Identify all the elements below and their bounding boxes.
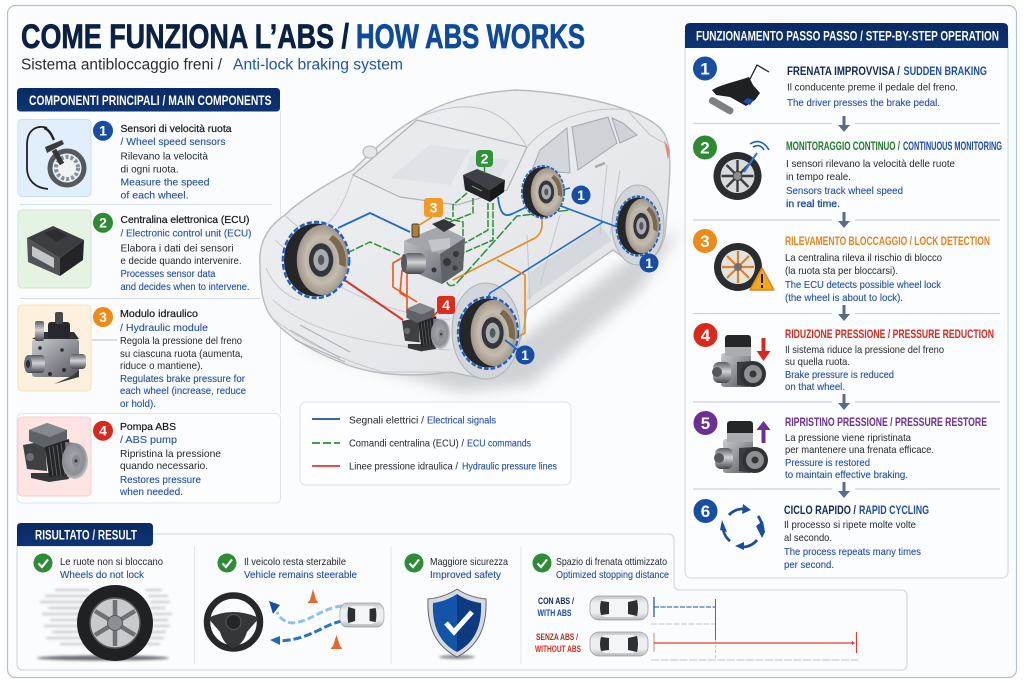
- legend: [300, 402, 571, 485]
- stopping line: without ABS: [651, 632, 860, 660]
- label: without ABS: [535, 632, 581, 655]
- text step 6: [784, 503, 929, 571]
- text: wheel speed sensors: Measure the speed: [120, 176, 210, 188]
- hydraulic and electrical lines: [330, 188, 620, 340]
- badge step 3: 3: [700, 232, 710, 251]
- text step 5: La pressione viene ripristinata: [785, 432, 911, 444]
- text step 3: The ECU detects possible wheel lock: [785, 279, 942, 291]
- text step 6: RAPID CYCLING: [859, 503, 929, 517]
- brake disc: rear upper: [522, 166, 564, 218]
- text step 2: I sensori rilevano la velocità delle ruote: [786, 158, 955, 170]
- badge step 2: 2: [700, 138, 710, 158]
- result: vehicle remains steerable: [207, 554, 384, 649]
- text: hydraulic module: Regulates brake pressure for: [120, 373, 245, 385]
- panel: step-by-step operation: [685, 23, 1008, 578]
- legend: electrical signals: Segnali elettrici /: [349, 414, 424, 426]
- arrow 5 to 6: [693, 482, 1000, 498]
- text: hydraulic module: or hold).: [120, 398, 156, 410]
- text step 4: [785, 327, 994, 393]
- text: hydraulic module: su ciascuna ruota (aumenta,: [120, 348, 243, 360]
- badge step 4: 4: [701, 326, 711, 345]
- text: electronic control unit: Elabora i dati dei sensori: [120, 243, 234, 255]
- badge 4: [93, 421, 113, 441]
- text step 2: Sensors track wheel speed: [786, 185, 903, 197]
- text: wheel speed sensors: [120, 123, 232, 202]
- badge step 6: 6: [701, 502, 710, 521]
- text: ABS pump: / ABS pump: [120, 434, 177, 446]
- heading: main components: COMPONENTI PRINCIPALI / MAIN COMPONENTS: [29, 92, 272, 108]
- badge step 2: [693, 136, 717, 160]
- badge 1 rear upper: 1: [577, 187, 585, 203]
- panel: result: [17, 523, 907, 670]
- icon: ECU box: [27, 226, 84, 276]
- icon: steering wheel: [207, 596, 260, 648]
- result: vehicle remains steerable: Vehicle remains steerable: [244, 569, 357, 581]
- text: wheel speed sensors: Sensori di velocità ruota: [120, 123, 232, 135]
- badge step 5: 5: [701, 414, 710, 433]
- text: wheel speed sensors: di ogni ruota.: [120, 164, 178, 176]
- check icon: [34, 554, 52, 572]
- arrows: steering paths: [269, 601, 342, 645]
- component 1: wheel speed sensors: [18, 120, 232, 202]
- brake disc: rear right: [616, 196, 660, 256]
- arrow: pressure down: [756, 338, 770, 361]
- component 3: hydraulic module: [18, 305, 246, 410]
- text step 4: Brake pressure is reduced: [785, 369, 894, 381]
- badge 3: 3: [99, 309, 107, 325]
- legend: electrical signals: Electrical signals: [427, 414, 496, 426]
- text step 4: Il sistema riduce la pressione del freno: [785, 344, 944, 356]
- component 4: ABS pump: [18, 417, 221, 498]
- badge 1: [93, 121, 113, 141]
- text: wheel speed sensors: of each wheel.: [120, 190, 188, 202]
- text: electronic control unit: Processes sensor data: [120, 268, 216, 280]
- text step 1: FRENATA IMPROVVISA /: [787, 64, 901, 78]
- text: ABS pump: quando necessario.: [120, 460, 208, 472]
- step 5: [694, 411, 987, 481]
- text step 3: [785, 234, 990, 304]
- text step 6: al secondo.: [784, 532, 832, 544]
- label: without ABS: SENZA ABS /: [536, 632, 578, 643]
- result: wheels do not lock: Le ruote non si bloccano: [60, 556, 163, 568]
- check icon: [218, 554, 236, 572]
- text: ABS pump: Ripristina la pressione: [120, 448, 221, 460]
- legend: ECU commands: Comandi centralina (ECU) /: [349, 438, 464, 450]
- heading: result: RISULTATO / RESULT: [35, 527, 138, 542]
- badge 3 on car: 3: [430, 200, 438, 216]
- text step 3: (la ruota sta per bloccarsi).: [785, 265, 898, 277]
- text: electronic control unit: e decide quando intervenire.: [120, 255, 242, 267]
- text step 6: per second.: [784, 559, 834, 571]
- text: wheel speed sensors: Rilevano la velocità: [120, 150, 208, 162]
- text step 2: in real time.: [786, 198, 840, 210]
- badge step 3: [693, 229, 717, 253]
- car diagram: [260, 90, 680, 392]
- legend: electrical signals: [312, 414, 496, 426]
- legend: ECU commands: [312, 438, 531, 450]
- label: with ABS: [538, 596, 574, 619]
- badge step 5: [694, 411, 718, 435]
- text: electronic control unit: [120, 214, 252, 293]
- text step 2: [786, 139, 1002, 210]
- badge 1 front: 1: [521, 347, 529, 363]
- result: optimized stopping distance: [532, 554, 860, 660]
- icon: module pressure up: [714, 421, 768, 473]
- step 1: [693, 56, 987, 115]
- step 4: [694, 323, 994, 393]
- badge 3 on car: [418, 198, 443, 226]
- result: improved safety: Maggiore sicurezza: [430, 556, 508, 568]
- badge 4: 4: [99, 423, 107, 439]
- badge 2: 2: [99, 215, 107, 231]
- panel: main components: [17, 88, 280, 503]
- component 2: ECU: [18, 210, 252, 293]
- arrow 1 to 2: [693, 116, 1000, 132]
- label: with ABS: WITH ABS: [538, 608, 572, 619]
- badge 2: [93, 213, 113, 233]
- text: ABS pump: Restores pressure: [120, 474, 201, 486]
- tyre shells: [452, 185, 664, 379]
- badge 1 front: [505, 340, 534, 364]
- heading: result: [17, 523, 153, 546]
- badge 1: 1: [99, 123, 107, 139]
- icon: shoe on pedal: [708, 65, 769, 115]
- legend: hydraulic pressure lines: Hydraulic pressure lines: [462, 460, 557, 472]
- icon: hydraulic module: [24, 312, 86, 384]
- text step 1: The driver presses the brake pedal.: [787, 97, 940, 109]
- ABS pump on car: [402, 303, 450, 351]
- badge 2 on car: [476, 150, 493, 173]
- badge 1 rear right: 1: [645, 255, 653, 271]
- badge step 1: [693, 56, 717, 80]
- subtitle: [21, 56, 403, 74]
- text step 4: on that wheel.: [785, 381, 845, 393]
- text step 1: SUDDEN BRAKING: [904, 64, 987, 78]
- heading: main components: [17, 88, 280, 112]
- text step 2: MONITORAGGIO CONTINUO /: [786, 139, 900, 153]
- result: wheels do not lock: [34, 554, 172, 661]
- text: wheel speed sensors: / Wheel speed sensors: [120, 136, 226, 148]
- text step 5: to maintain effective braking.: [785, 469, 908, 481]
- result: optimized stopping distance: Optimized stopping distance: [556, 569, 669, 581]
- legend: hydraulic pressure lines: Linee pressione idraulica /: [349, 460, 458, 472]
- text: ABS pump: Pompa ABS: [120, 421, 176, 433]
- text: electronic control unit: Centralina elettronica (ECU): [120, 214, 250, 226]
- text: hydraulic module: [120, 308, 246, 410]
- text step 6: The process repeats many times: [784, 546, 921, 558]
- text: hydraulic module: Modulo idraulico: [120, 308, 198, 320]
- brake disc: front left: [283, 222, 349, 298]
- text step 2: in tempo reale.: [786, 171, 851, 183]
- label: with ABS: CON ABS /: [538, 596, 574, 607]
- text step 4: su quella ruota.: [785, 356, 850, 368]
- icon: module pressure down: [712, 335, 766, 387]
- step 6: [694, 499, 929, 571]
- text step 5: [785, 415, 987, 481]
- title: COME FUNZIONA L’ABS /: [21, 18, 349, 56]
- brake disc: front bottom: [458, 297, 518, 369]
- result: improved safety: [404, 554, 508, 659]
- text step 5: Pressure is restored: [785, 457, 870, 469]
- car: without ABS: [590, 632, 648, 656]
- icon: spinning tyre: [37, 585, 172, 661]
- ABS hydraulic module: [401, 219, 465, 284]
- icon: wheel with warning: [714, 243, 774, 291]
- icon: ABS pump: [23, 423, 88, 482]
- badge step 1: 1: [700, 60, 710, 78]
- text: electronic control unit: / Electronic control unit (ECU): [120, 228, 252, 240]
- text: hydraulic module: riduce o mantiene).: [120, 360, 203, 372]
- text: hydraulic module: / Hydraulic module: [120, 322, 208, 334]
- icon: shield: [428, 589, 486, 659]
- text: hydraulic module: each wheel (increase, reduce: [120, 385, 246, 397]
- label: without ABS: WITHOUT ABS: [535, 644, 581, 655]
- text step 1: Il conducente preme il pedale del freno.: [787, 82, 958, 94]
- result: improved safety: Improved safety: [430, 569, 502, 581]
- text step 6: Il processo si ripete molte volte: [784, 519, 916, 531]
- text step 5: per mantenere una frenata efficace.: [785, 444, 934, 456]
- text step 3: (the wheel is about to lock).: [785, 292, 903, 304]
- check icon: [404, 554, 424, 572]
- car body: [260, 90, 670, 378]
- arrow 2 to 3: [693, 212, 1000, 228]
- text: ABS pump: when needed.: [119, 486, 183, 498]
- car: with ABS: [590, 596, 648, 620]
- text step 3: La centralina rileva il rischio di blocco: [785, 252, 942, 264]
- arrow 4 to 5: [693, 394, 1000, 410]
- check icon: [532, 554, 552, 572]
- badge step 4: [694, 323, 718, 347]
- text: ABS pump: [119, 421, 221, 498]
- icon: car top view: [340, 603, 384, 627]
- badge 2 on car: 2: [481, 150, 489, 166]
- text step 1: [787, 64, 987, 109]
- icon: cone lower: [331, 635, 342, 649]
- heading: step by step: [685, 23, 1008, 48]
- ECU box on car: [463, 169, 505, 202]
- arrow 3 to 4: [693, 305, 1000, 321]
- badge 3: [93, 307, 113, 327]
- arrow: pressure up: [756, 421, 770, 443]
- icon: cone upper: [308, 589, 318, 603]
- badge step 6: [694, 499, 718, 523]
- text: hydraulic module: Regola la pressione del freno: [120, 335, 242, 347]
- badge 4 on car: 4: [442, 297, 450, 313]
- icon: sensor: [27, 127, 84, 189]
- step 3: [693, 229, 990, 304]
- badge 1 rear right: [640, 254, 658, 272]
- text step 6: CICLO RAPIDO /: [784, 503, 856, 517]
- subtitle: Sistema antibloccaggio freni /: [21, 56, 223, 74]
- legend: ECU commands: ECU commands: [467, 438, 531, 450]
- text: electronic control unit: and decides when to intervene.: [120, 281, 250, 293]
- result: vehicle remains steerable: Il veicolo resta sterzabile: [244, 556, 346, 568]
- badge 4 on car: [432, 296, 455, 318]
- step 2: [693, 136, 1002, 210]
- stopping line: with ABS: [651, 597, 716, 660]
- subtitle: Anti-lock braking system: [233, 56, 403, 74]
- result: optimized stopping distance: Spazio di frenata ottimizzato: [556, 556, 667, 568]
- badge 1 rear upper: [572, 186, 590, 204]
- icon: rapid cycle arrows: [720, 504, 765, 550]
- title: HOW ABS WORKS: [356, 18, 585, 56]
- icon: wheel with sensor signal: [714, 142, 769, 200]
- result: wheels do not lock: Wheels do not lock: [60, 569, 145, 581]
- legend: hydraulic pressure lines: [312, 460, 557, 472]
